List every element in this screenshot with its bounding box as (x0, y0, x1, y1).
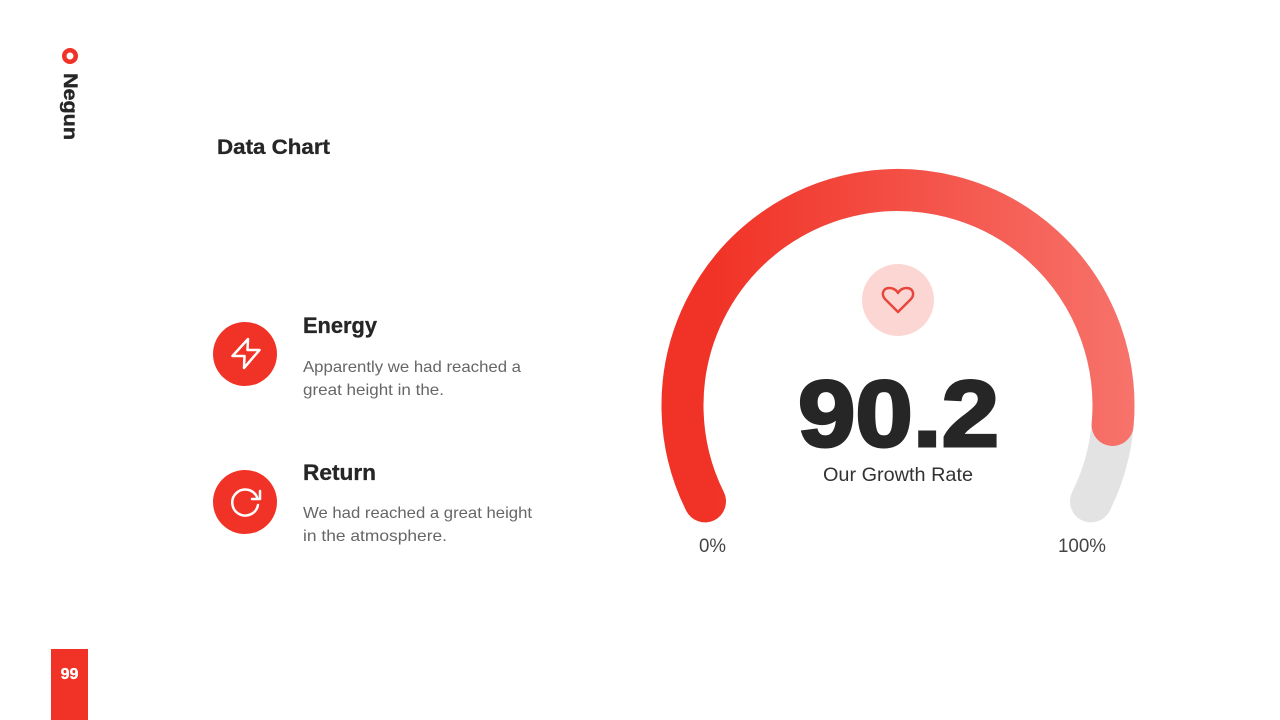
return description: in the atmosphere. (303, 528, 447, 545)
icon: heart (862, 264, 934, 336)
energy title: Energy (303, 313, 378, 338)
energy description: great height in the. (303, 382, 444, 399)
return description (303, 505, 533, 545)
heading: Data Chart (217, 136, 330, 159)
page number: 99 (61, 666, 78, 683)
max label: 100% (1058, 535, 1106, 557)
gauge value arc (682, 190, 1113, 501)
return description: We had reached a great height (303, 505, 533, 522)
logo: Negun (59, 73, 80, 140)
logo (59, 50, 80, 140)
energy description: Apparently we had reached a (303, 359, 521, 376)
icon: lightning bolt (213, 322, 277, 386)
gauge chart (682, 190, 1114, 557)
gauge caption: Our Growth Rate (823, 464, 973, 486)
gauge value: 90.2 (798, 361, 999, 466)
item: return (213, 460, 533, 545)
return title: Return (303, 460, 376, 485)
page number (51, 649, 88, 720)
icon: refresh arrow (213, 470, 277, 534)
min label: 0% (699, 535, 726, 557)
item: energy (213, 313, 521, 399)
gauge track (682, 190, 1114, 501)
energy description (303, 359, 521, 399)
